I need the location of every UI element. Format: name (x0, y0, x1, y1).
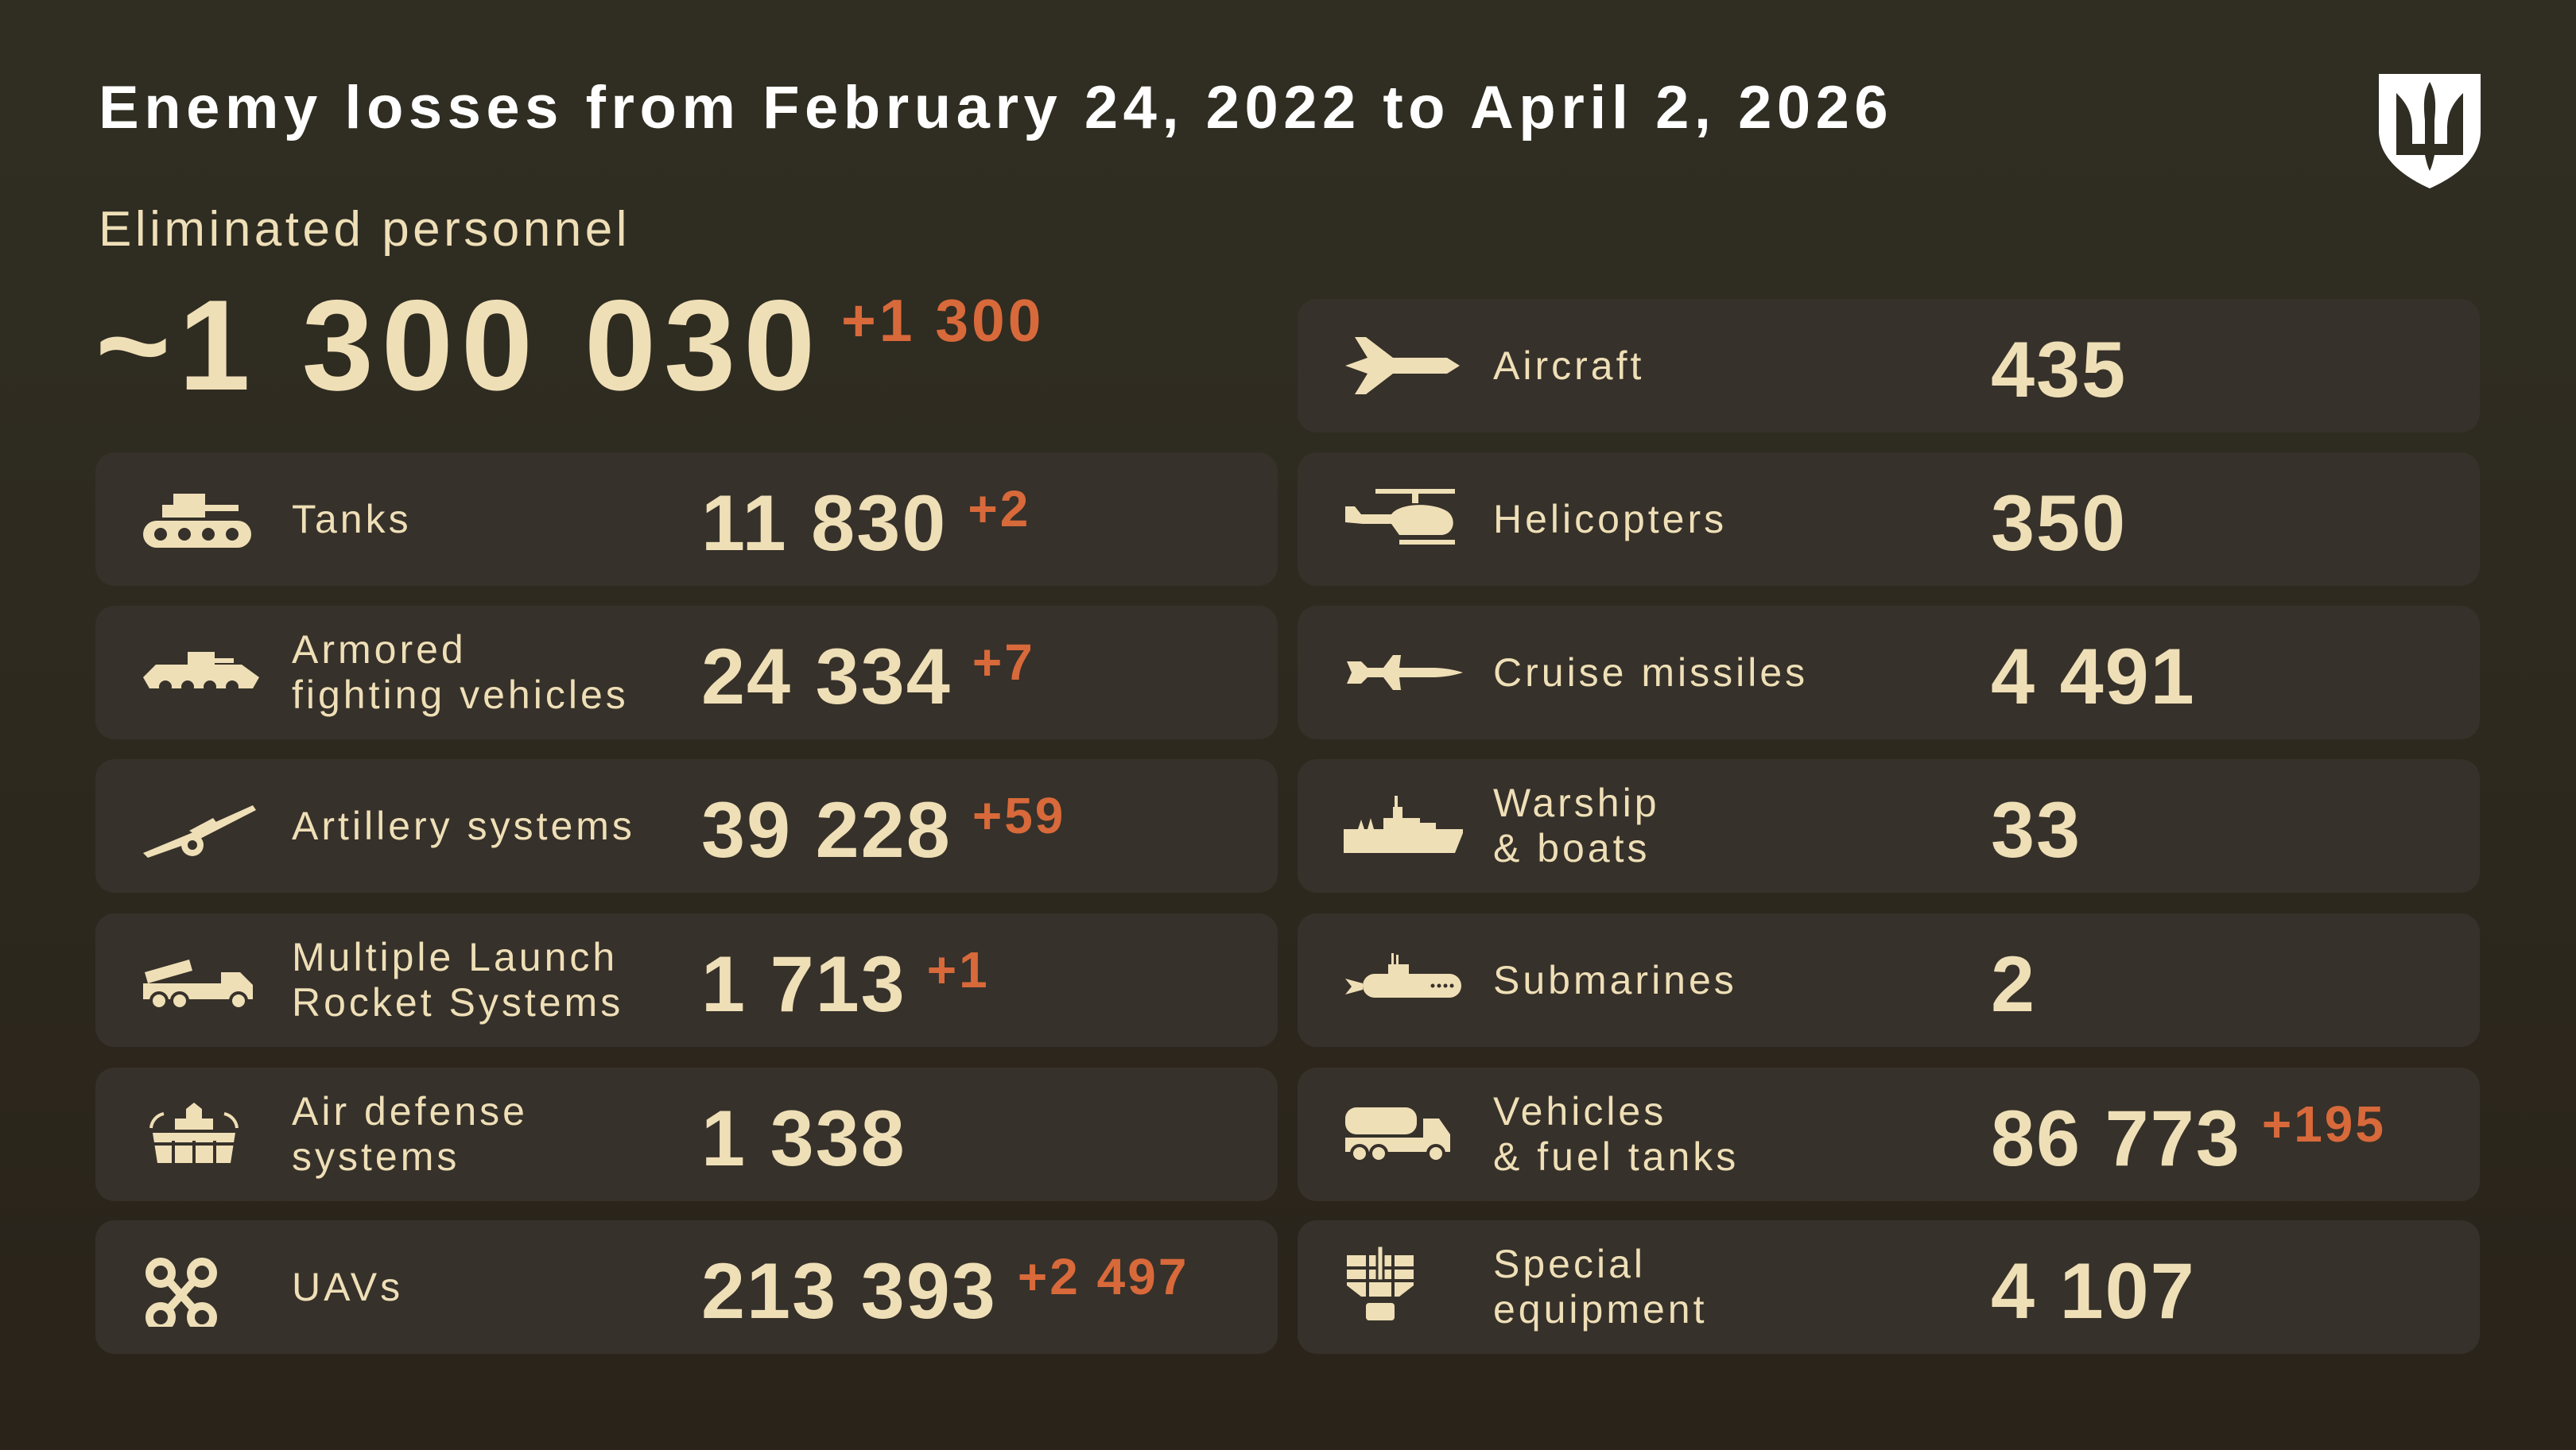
number: 1 338 (701, 1094, 906, 1182)
number: 350 (1991, 479, 2127, 567)
number: 1 713 +1 (701, 940, 990, 1028)
number: 24 334 +7 (701, 632, 1035, 720)
icon: special equipment (1347, 1246, 1414, 1320)
number: 4 107 (1991, 1246, 2196, 1335)
icon: AFV (143, 652, 259, 688)
label (292, 627, 629, 717)
row: vehicles and fuel tanks (1298, 1068, 2480, 1201)
number: 213 393 +2 497 (701, 1246, 1189, 1335)
label: & boats (1493, 826, 1651, 870)
label (1493, 1089, 1739, 1179)
label: Special (1493, 1242, 1646, 1286)
number: 33 (1991, 785, 2081, 874)
label (292, 1089, 528, 1179)
title: Enemy losses from February 24, 2022 to April 2, 2026 (99, 74, 1893, 142)
icon: warship (1344, 796, 1463, 853)
icon: missile (1347, 655, 1463, 690)
row: warships (1298, 759, 2480, 893)
label: systems (292, 1134, 460, 1179)
label: Air defense (292, 1089, 528, 1134)
label: Submarines (1493, 957, 1737, 1002)
row: artillery (95, 759, 1278, 893)
label (1493, 781, 1660, 870)
row: air defense (95, 1068, 1278, 1201)
row: helicopters (1298, 452, 2480, 586)
icon: artillery (143, 805, 256, 858)
icon: fuel truck (1345, 1107, 1450, 1160)
icon: drone (145, 1258, 217, 1327)
icon: aircraft (1345, 337, 1460, 394)
label: Cruise missiles (1493, 650, 1808, 695)
icon: submarine (1345, 953, 1461, 998)
label: UAVs (292, 1264, 403, 1308)
label: equipment (1493, 1287, 1708, 1332)
row: tanks (95, 452, 1278, 586)
number: 435 (1991, 325, 2127, 413)
label (1493, 1242, 1708, 1332)
logo: shield with trident (2379, 74, 2481, 188)
label: Armored (292, 627, 467, 672)
row: submarines (1298, 913, 2480, 1047)
label: & fuel tanks (1493, 1134, 1739, 1179)
number: 4 491 (1991, 632, 2196, 720)
row: aircraft (1298, 299, 2480, 432)
label: Vehicles (1493, 1089, 1666, 1134)
row: UAVs (95, 1220, 1278, 1354)
label: Artillery systems (292, 803, 635, 847)
label: Aircraft (1493, 343, 1644, 388)
row: armored fighting vehicles (95, 606, 1278, 739)
label: Warship (1493, 781, 1660, 825)
subtitle: eliminated personnel: Eliminated personnel (99, 202, 630, 257)
row: special equipment (1298, 1220, 2480, 1354)
number: 2 (1991, 940, 2036, 1028)
row: cruise missiles (1298, 606, 2480, 739)
number: 39 228 +59 (701, 785, 1065, 874)
big number personnel: ~1 300 030 (95, 273, 823, 417)
label: Helicopters (1493, 496, 1727, 541)
label (292, 935, 623, 1025)
personnel increment: +1 300 (841, 287, 1044, 354)
label: fighting vehicles (292, 673, 629, 717)
number: 86 773 +195 (1991, 1094, 2386, 1182)
icon: tank (143, 494, 251, 548)
row: MLRS (95, 913, 1278, 1047)
icon: MLRS (143, 960, 253, 1007)
icon: air defense (149, 1103, 239, 1163)
label: Tanks (292, 496, 412, 541)
label: Multiple Launch (292, 935, 618, 979)
number: 11 830 +2 (701, 479, 1030, 567)
label: Rocket Systems (292, 980, 623, 1025)
icon: helicopter (1345, 489, 1455, 545)
